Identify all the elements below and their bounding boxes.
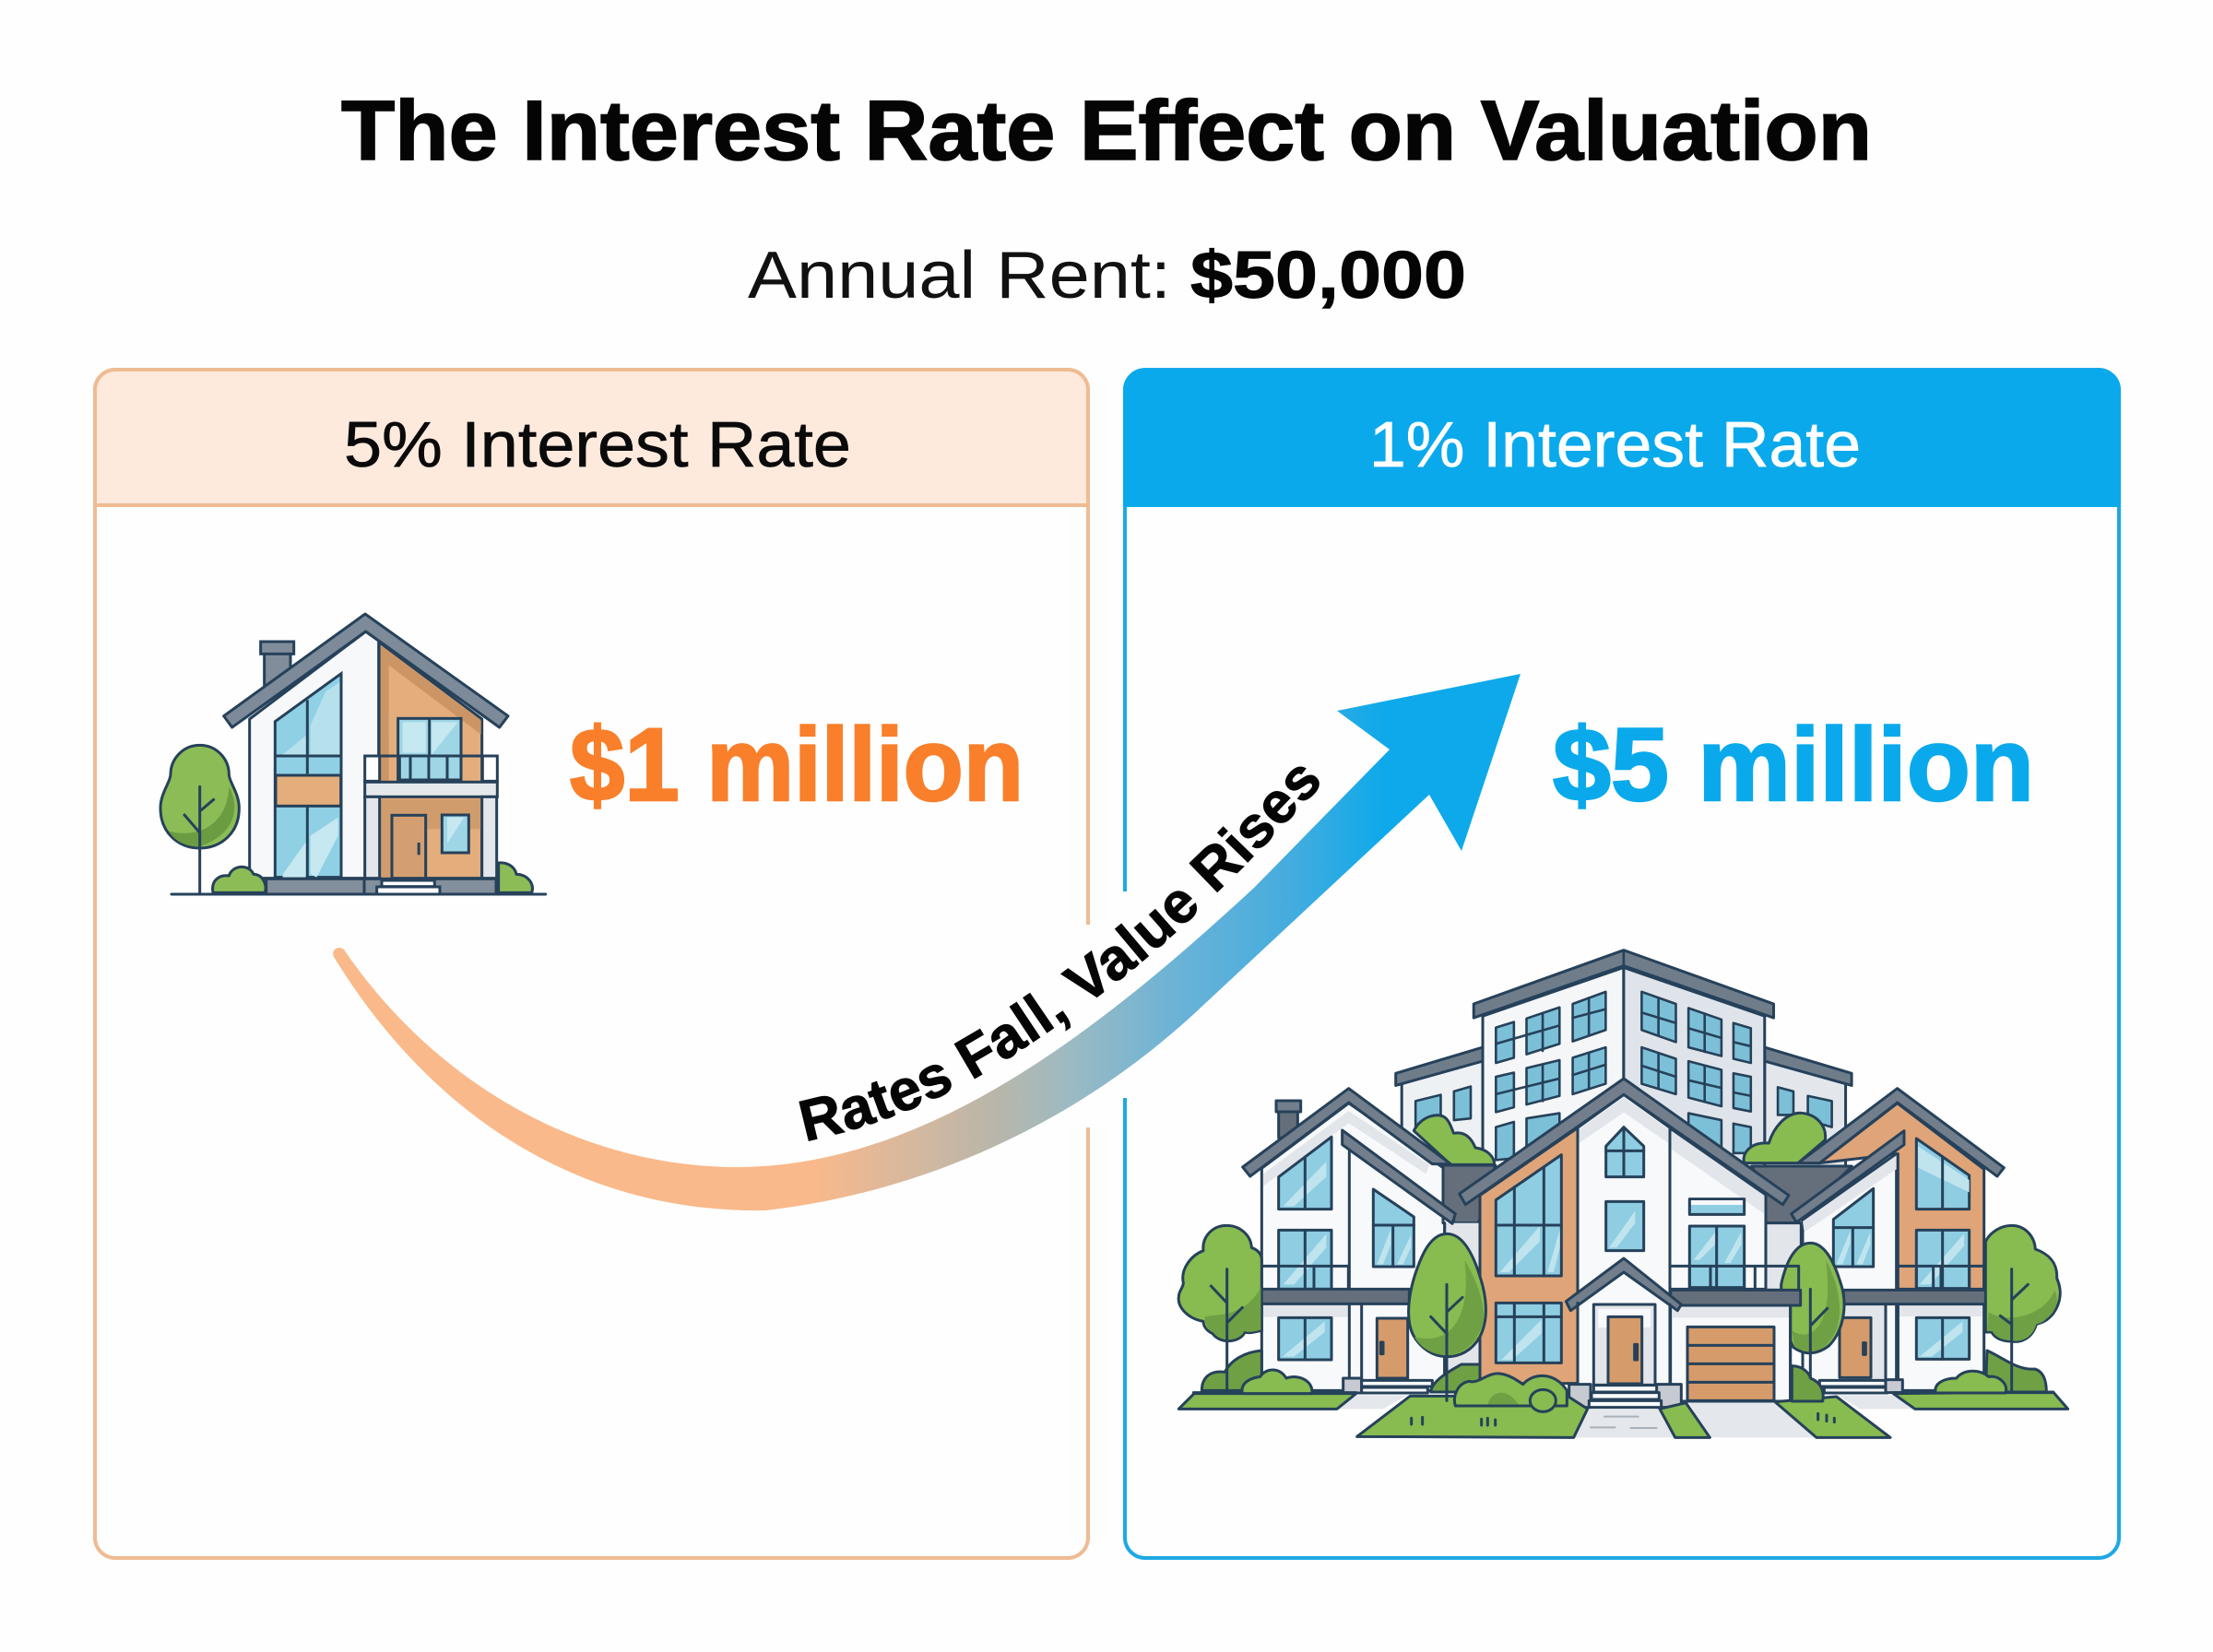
door bbox=[392, 815, 426, 879]
arrow: rates fall, value rises bbox=[333, 674, 1521, 1211]
tree bbox=[160, 745, 239, 893]
house walls bbox=[250, 631, 482, 879]
panel: 1% interest rate bbox=[1123, 369, 2121, 1558]
large window bbox=[275, 674, 341, 878]
heading: 5% interest rate: 5% Interest Rate bbox=[344, 408, 851, 480]
lawns bbox=[1178, 1392, 2068, 1437]
hip roofs bbox=[1394, 1165, 1852, 1383]
chimney bbox=[261, 642, 294, 687]
panel header: 1% bbox=[1123, 369, 2121, 507]
panel header: 5% bbox=[95, 370, 1088, 505]
foundation and steps bbox=[266, 879, 496, 894]
value: $1 million: $1 million bbox=[570, 707, 1024, 822]
title: The Interest Rate Effect on Valuation bbox=[341, 84, 1872, 178]
subtitle: annual rent: Annual Rent: bbox=[748, 239, 1171, 313]
illustration: single house bbox=[160, 614, 546, 894]
right-centre tree bbox=[1781, 1243, 1844, 1378]
subtitle: annual rent: $50,000 bbox=[1190, 239, 1466, 313]
value: $5 million: $5 million bbox=[1553, 707, 2034, 822]
arrow label: Rates Fall, Value Rises bbox=[799, 767, 1320, 1141]
bushes bbox=[213, 863, 532, 892]
subtitle: annual rent bbox=[748, 239, 1466, 313]
upper window and balcony bbox=[365, 718, 497, 879]
illustration: neighbourhood of houses bbox=[1178, 950, 2068, 1437]
panel: 5% interest rate bbox=[95, 370, 1088, 1558]
small window bbox=[442, 815, 468, 853]
pavement bbox=[1339, 1395, 1915, 1437]
back tower bbox=[1396, 950, 1852, 1167]
roof bbox=[224, 614, 508, 727]
right house bbox=[1792, 1089, 2004, 1393]
back bushes bbox=[1414, 1113, 1826, 1164]
left house bbox=[1243, 1089, 1455, 1393]
houses, trees and lawns bbox=[1178, 1079, 2068, 1437]
centre house bbox=[1460, 1079, 1801, 1408]
trees and bushes bbox=[1178, 1225, 2060, 1411]
heading: 1% interest rate: 1% Interest Rate bbox=[1369, 408, 1861, 480]
ground bbox=[172, 890, 546, 898]
